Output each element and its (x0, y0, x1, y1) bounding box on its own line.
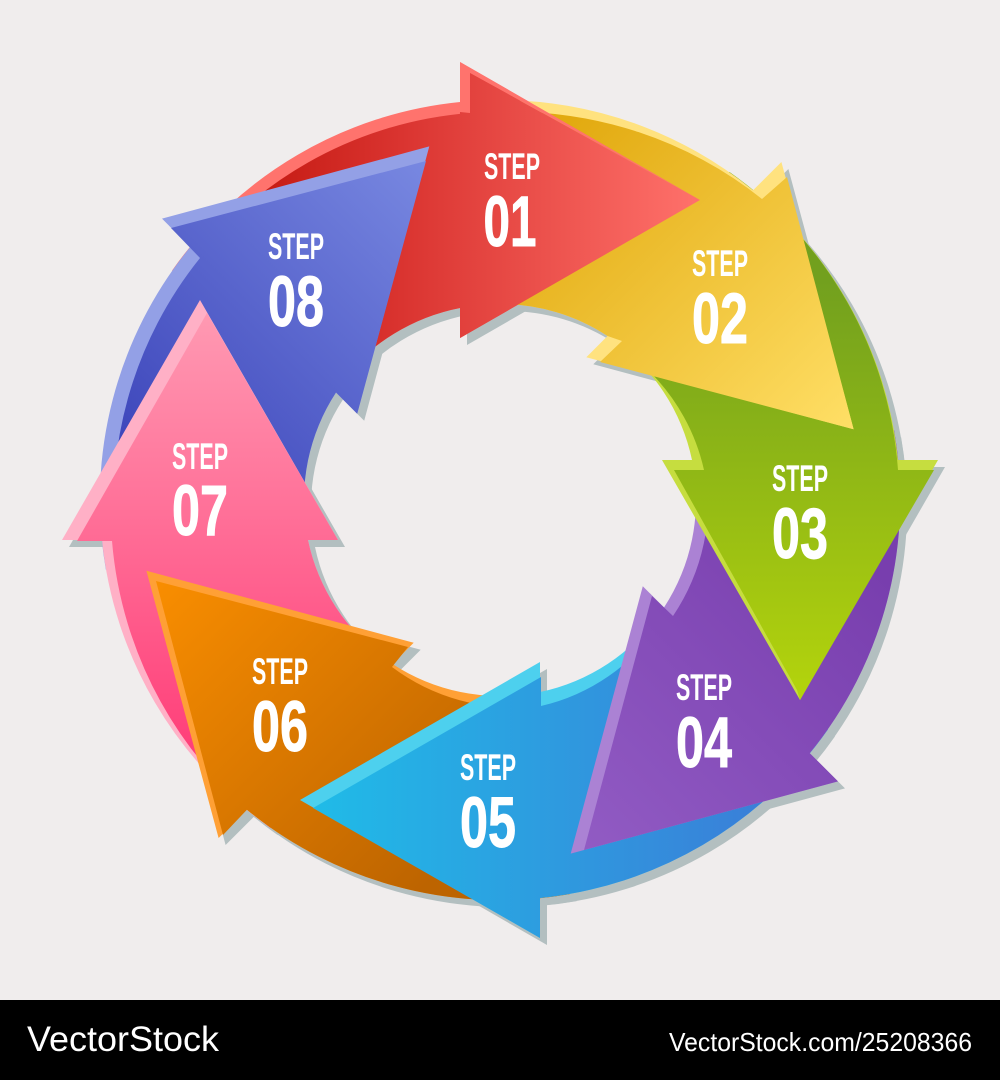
label: step 06: 06 (252, 688, 308, 767)
label: step 01 (484, 146, 540, 262)
label: step 08: 08 (268, 263, 324, 342)
arrow 06: orange (146, 571, 570, 900)
label: step 04: STEP (676, 667, 732, 708)
arrow 03: green (612, 172, 938, 700)
label: step 05: 05 (460, 784, 516, 863)
label: step 01: 01 (484, 183, 536, 262)
label: step 08 (268, 226, 324, 342)
label: step 08: STEP (268, 226, 324, 267)
label: step 03: STEP (772, 458, 828, 499)
arrow 01 head: red, over yellow tail (460, 62, 700, 338)
label: step 01: STEP (484, 146, 540, 187)
arrow 04: purple (571, 430, 900, 854)
arrow 01 body: red (172, 62, 700, 381)
footer image id: VectorStock.com/25208366 (669, 1027, 972, 1057)
footer bar (0, 1000, 1000, 1080)
label: step 05 (460, 747, 516, 863)
label: step 03 (772, 458, 828, 574)
label: step 02: STEP (692, 243, 748, 284)
arrow 07: pink (62, 300, 388, 828)
label: step 06: STEP (252, 651, 308, 692)
label: step 02 (692, 243, 748, 359)
drop shadow of the arrow ring (69, 69, 945, 945)
label: step 05: STEP (460, 747, 516, 788)
arrow 05: blue (300, 612, 828, 938)
label: step 06 (252, 651, 308, 767)
label: step 07: STEP (172, 436, 228, 477)
label: step 03: 03 (772, 495, 828, 574)
label: step 02: 02 (692, 280, 748, 359)
label: step 07: 07 (172, 472, 228, 551)
label: step 07 (172, 436, 228, 551)
arrow 02: yellow (500, 100, 854, 429)
label: step 04: 04 (676, 704, 732, 783)
arrow 08: violet (100, 146, 429, 570)
footer logo text: VectorStock (27, 1020, 220, 1059)
label: step 04 (676, 667, 732, 783)
